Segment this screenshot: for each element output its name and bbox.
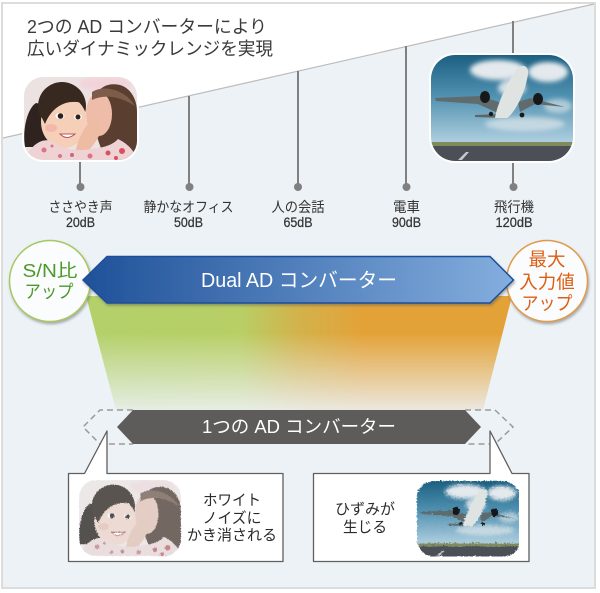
- circle: max input up: 最大: [528, 249, 566, 270]
- circle: S/N ratio up: [10, 240, 90, 322]
- label: quiet office 50dB: 50dB: [174, 214, 203, 230]
- label: train 90dB: 電車: [393, 199, 420, 215]
- title: [27, 17, 273, 59]
- photo: distorted airplane: [416, 480, 519, 556]
- marker lines: [76, 21, 518, 191]
- photo: noisy girls: [79, 480, 181, 556]
- callout: white noise: かき消される: [187, 527, 277, 544]
- arrow: single AD converter: 1つの AD コンバーター: [202, 417, 396, 437]
- dashed outline of expanded range: [83, 410, 513, 444]
- callout: white noise: [68, 431, 283, 562]
- label: conversation 65dB: 65dB: [284, 214, 312, 230]
- label: whisper 20dB: ささやき声: [48, 199, 112, 215]
- callout: distortion: [314, 431, 529, 562]
- title: 2つの AD コンバーターにより: [27, 17, 267, 37]
- label: conversation 65dB: [272, 199, 324, 230]
- photo: girls whispering: [22, 75, 139, 162]
- callout: white noise: ホワイト: [203, 492, 261, 509]
- label: train 90dB: [392, 199, 421, 230]
- title: 広いダイナミックレンジを実現: [27, 39, 273, 59]
- label: quiet office 50dB: [144, 199, 234, 230]
- callout: white noise: ノイズに: [202, 510, 262, 527]
- arrow: Dual AD converter: Dual AD コンバーター: [201, 269, 397, 292]
- circle: max input up: [506, 240, 588, 322]
- label: airplane 120dB: 120dB: [496, 214, 532, 230]
- callout: distortion: 生じる: [343, 519, 387, 536]
- circle: max input up: アップ: [522, 293, 573, 314]
- label: quiet office 50dB: 静かなオフィス: [144, 199, 234, 215]
- label: whisper 20dB: 20dB: [66, 214, 95, 230]
- arrow: Dual AD converter: [83, 256, 514, 303]
- label: whisper 20dB: [48, 199, 112, 230]
- label: airplane 120dB: [494, 199, 534, 230]
- label: airplane 120dB: 飛行機: [494, 199, 534, 215]
- photo: airplane: [429, 53, 575, 163]
- gradient range band: [86, 296, 512, 410]
- label: train 90dB: 90dB: [392, 214, 421, 230]
- circle: S/N ratio up: アップ: [24, 282, 74, 302]
- callout: distortion: ひずみが: [335, 501, 395, 518]
- arrow: single AD converter: [117, 410, 481, 444]
- label: conversation 65dB: 人の会話: [272, 199, 324, 215]
- circle: S/N ratio up: S/N比: [22, 261, 78, 281]
- circle: max input up: 入力値: [519, 272, 575, 292]
